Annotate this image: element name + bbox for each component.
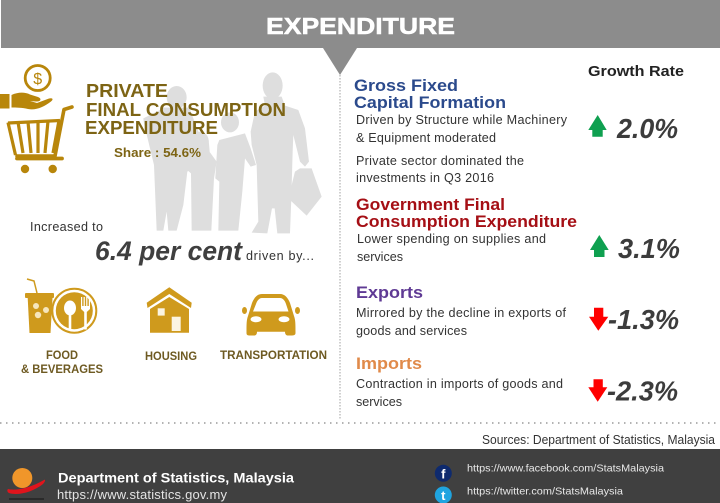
heading: Imports bbox=[356, 354, 422, 373]
description: goods and services bbox=[356, 324, 467, 338]
icon: housing bbox=[147, 287, 192, 333]
heading: Exports bbox=[356, 283, 423, 302]
description bbox=[356, 306, 566, 338]
description bbox=[356, 113, 568, 185]
description: Mirrored by the decline in exports of bbox=[356, 306, 566, 320]
value: 2.0% bbox=[616, 113, 678, 144]
footer bbox=[0, 449, 720, 503]
heading bbox=[354, 76, 506, 112]
description: services bbox=[356, 395, 402, 409]
value: -1.3% bbox=[608, 304, 679, 335]
icon: shopping cart with coin and hand: $ bbox=[33, 71, 42, 88]
icon: twitter: t bbox=[441, 488, 446, 503]
website url: https://www.statistics.gov.my bbox=[57, 487, 228, 502]
family silhouette bbox=[143, 72, 322, 233]
increase statement bbox=[30, 220, 314, 266]
heading: private final consumption expenditure: EXPENDITURE bbox=[85, 117, 218, 138]
label: transportation: TRANSPORTATION bbox=[220, 348, 327, 362]
description: Lower spending on supplies and bbox=[357, 232, 546, 246]
description: Contraction in imports of goods and bbox=[356, 377, 563, 391]
heading: private final consumption expenditure: FINAL CONSUMPTION bbox=[86, 99, 286, 120]
value: -2.3% bbox=[607, 376, 678, 407]
heading: Capital Formation bbox=[354, 93, 506, 112]
header banner: EXPENDITURE bbox=[266, 13, 455, 39]
column heading: growth rate: Growth Rate bbox=[588, 63, 684, 80]
panel: gross fixed capital formation bbox=[354, 76, 678, 185]
label: food and beverages bbox=[21, 348, 103, 376]
icon: red down arrow bbox=[589, 308, 608, 331]
icon: car bbox=[242, 294, 300, 336]
description bbox=[356, 377, 563, 409]
label: housing: HOUSING bbox=[145, 349, 197, 363]
icon: green up arrow bbox=[588, 115, 607, 137]
icon: facebook bbox=[435, 465, 452, 482]
twitter url: https://twitter.com/StatsMalaysia bbox=[467, 486, 623, 498]
heading: private final consumption expenditure bbox=[85, 80, 286, 138]
panel: exports bbox=[356, 283, 679, 338]
icon: shopping cart with coin and hand bbox=[0, 66, 72, 173]
icon: facebook: f bbox=[441, 466, 446, 482]
icon: green up arrow bbox=[590, 235, 609, 257]
value: 3.1% bbox=[618, 233, 680, 264]
heading: Consumption Expenditure bbox=[356, 212, 577, 231]
increase statement: 6.4 per cent bbox=[95, 236, 243, 266]
heading: private final consumption expenditure: PRIVATE bbox=[86, 80, 168, 101]
heading: Government Final bbox=[356, 195, 505, 214]
icon: department logo bbox=[7, 468, 45, 499]
sources note: Sources: Department of Statistics, Malaysia bbox=[482, 433, 715, 447]
panel: imports bbox=[356, 354, 678, 409]
increase statement: driven by... bbox=[246, 249, 314, 263]
heading bbox=[356, 195, 577, 231]
increase statement: Increased to bbox=[30, 220, 103, 234]
description: Driven by Structure while Machinery bbox=[356, 113, 568, 127]
description bbox=[357, 232, 546, 264]
department name: Department of Statistics, Malaysia bbox=[58, 470, 294, 486]
header banner bbox=[1, 0, 720, 75]
description: & Equipment moderated bbox=[356, 131, 496, 145]
label: food and beverages: FOOD bbox=[46, 348, 78, 362]
facebook url: https://www.facebook.com/StatsMalaysia bbox=[467, 462, 664, 474]
panel: private final consumption expenditure bbox=[0, 66, 327, 376]
description: services bbox=[357, 250, 403, 264]
icon: food and beverages bbox=[25, 279, 96, 333]
description: investments in Q3 2016 bbox=[356, 171, 494, 185]
description: Private sector dominated the bbox=[356, 154, 524, 168]
heading: Gross Fixed bbox=[354, 76, 458, 95]
icon: red down arrow bbox=[588, 379, 607, 402]
share value: Share : 54.6% bbox=[114, 146, 201, 160]
panel: government final consumption expenditure bbox=[356, 195, 680, 264]
label: food and beverages: & BEVERAGES bbox=[21, 362, 103, 376]
icon: twitter bbox=[435, 486, 452, 503]
